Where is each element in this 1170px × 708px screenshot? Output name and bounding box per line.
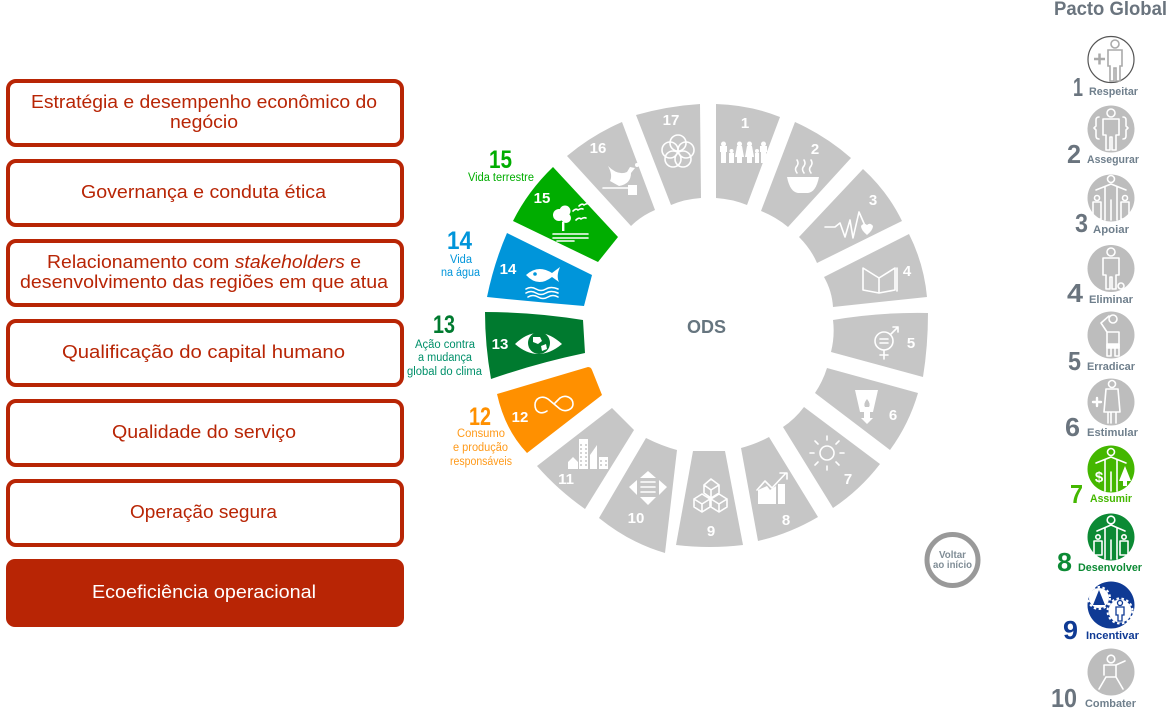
- label: ODS 12 Consumo e produção responsáveis: [450, 403, 512, 468]
- label: ODS 15 Vida terrestre: Vida terrestre: [468, 172, 534, 184]
- segment 15: [513, 167, 618, 262]
- label: ODS 13 Ação contra a mudança global do clima: 13: [433, 311, 455, 339]
- segment 7: 7: [844, 471, 852, 488]
- principle 2 Assegurar: 2: [1067, 139, 1081, 169]
- topic: Qualidade do serviço: [8, 401, 402, 465]
- topic: Governança e conduta ética: [8, 161, 402, 225]
- topic: Operação segura: Operação segura: [130, 501, 278, 522]
- principle 6 Estimular: 6: [1065, 412, 1080, 442]
- label: ODS 13 Ação contra a mudança global do clima: Ação contra: [415, 339, 476, 351]
- segment 10: [599, 438, 677, 553]
- topic: Operação segura: [8, 481, 402, 545]
- principle 5 Erradicar: Erradicar: [1087, 361, 1136, 373]
- segment 16: 16: [590, 140, 606, 157]
- panel: Pacto Global principles: [1051, 0, 1167, 708]
- segment 1: 1: [741, 115, 749, 132]
- principle 3 Apoiar: Apoiar: [1093, 224, 1130, 236]
- panel: materiality topics list: [6, 81, 404, 627]
- segment 13: [485, 312, 585, 379]
- topic: Relacionamento com stakeholders: Relacionamento com stakeholders e: [47, 251, 361, 272]
- segment 15: 15: [534, 190, 550, 207]
- segment 8: 8: [782, 512, 790, 529]
- topic: Ecoeficiência operacional (selected): [6, 559, 404, 627]
- principle 9 Incentivar: [1063, 582, 1140, 645]
- topic: Estratégia e desempenho econômico do negócio: [8, 81, 402, 145]
- segment 14: [487, 233, 592, 306]
- label: ODS 14 Vida na água: [441, 227, 481, 279]
- principle 5 Erradicar: 5: [1068, 346, 1081, 376]
- label: ODS 15 Vida terrestre: [468, 146, 534, 184]
- label: ODS 14 Vida na água: Vida: [450, 254, 473, 266]
- principle 9 Incentivar: Incentivar: [1086, 630, 1140, 642]
- segment 16: [567, 122, 655, 226]
- segment 12: [497, 367, 602, 453]
- label: ODS 14 Vida na água: na água: [441, 267, 481, 279]
- principle 3 Apoiar: 3: [1075, 208, 1088, 238]
- principle 1 Respeitar: 1: [1073, 72, 1083, 102]
- topic: Relacionamento com stakeholders: [8, 241, 402, 305]
- segment 5: 5: [907, 335, 915, 352]
- button: Voltar ao início: [927, 534, 978, 586]
- principle 1 Respeitar: Respeitar: [1089, 86, 1139, 98]
- principle 1 Respeitar: [1073, 36, 1139, 102]
- segment 17: [636, 104, 701, 205]
- principle 9 Incentivar: 9: [1063, 615, 1078, 645]
- topic: Relacionamento com stakeholders: desenvolvimento das regiões em que atua: [20, 271, 389, 292]
- segment 17: 17: [663, 112, 679, 129]
- topic: Qualificação do capital humano: [8, 321, 402, 385]
- principle 5 Erradicar: [1068, 312, 1136, 376]
- segment 9: 9: [707, 523, 715, 540]
- segment 3: 3: [869, 192, 877, 209]
- wheel centre label: ODS: [687, 317, 726, 337]
- segment 10: 10: [628, 510, 644, 527]
- segment 4: 4: [903, 263, 912, 280]
- segment 6: 6: [889, 407, 897, 424]
- topic: Estratégia e desempenho econômico do negócio: negócio: [170, 111, 238, 132]
- topic: Governança e conduta ética: Governança e conduta ética: [81, 181, 327, 202]
- label: ODS 12 Consumo e produção responsáveis: responsáveis: [450, 456, 512, 468]
- principle 8 Desenvolver: Desenvolver: [1078, 562, 1143, 574]
- label: ODS 13 Ação contra a mudança global do clima: a mudança: [418, 352, 473, 364]
- principle 4 Eliminar: 4: [1067, 278, 1084, 308]
- label: ODS 13 Ação contra a mudança global do clima: [407, 311, 483, 378]
- segment 3: [799, 169, 902, 263]
- topic: Estratégia e desempenho econômico do negócio: Estratégia e desempenho econômico do: [31, 91, 377, 112]
- principle 4 Eliminar: Eliminar: [1089, 294, 1134, 306]
- topic: Qualidade do serviço: Qualidade do serviço: [112, 421, 296, 442]
- principle 10 Combater: [1051, 648, 1137, 708]
- segment 5: [831, 313, 928, 377]
- label: ODS 12 Consumo e produção responsáveis: 12: [469, 403, 491, 431]
- label: ODS 15 Vida terrestre: 15: [489, 146, 512, 174]
- segment 9: [676, 451, 743, 547]
- button: Voltar ao início: Voltar: [939, 550, 966, 561]
- segment 6: [815, 368, 918, 450]
- segment 7: [783, 407, 880, 508]
- principle 6 Estimular: Estimular: [1087, 427, 1139, 439]
- button: Voltar ao início: ao início: [933, 560, 972, 571]
- principle 8 Desenvolver: [1057, 514, 1143, 577]
- segment 11: [537, 408, 634, 509]
- segment 14: 14: [500, 261, 517, 278]
- label: ODS 12 Consumo e produção responsáveis: Consumo: [457, 428, 505, 440]
- topic: Ecoeficiência operacional (selected): Ecoeficiência operacional: [92, 581, 316, 602]
- segment 11: 11: [558, 471, 574, 488]
- topic: Qualificação do capital humano: Qualificação do capital humano: [62, 341, 345, 362]
- segment 2: 2: [811, 141, 819, 158]
- segment 12: 12: [512, 409, 528, 426]
- label: ODS 13 Ação contra a mudança global do clima: global do clima: [407, 366, 483, 378]
- segment 2: [761, 122, 851, 227]
- label: ODS 12 Consumo e produção responsáveis: e produção: [453, 442, 508, 454]
- principle 7 Assumir: 7: [1070, 479, 1083, 509]
- segment 1: [716, 104, 780, 205]
- principle 4 Eliminar: [1067, 245, 1134, 308]
- principle 2 Assegurar: [1067, 106, 1140, 169]
- segment 13: 13: [492, 336, 508, 353]
- principle 7 Assumir: [1070, 446, 1134, 509]
- principle 7 Assumir: Assumir: [1090, 493, 1133, 505]
- principle 2 Assegurar: Assegurar: [1087, 154, 1140, 166]
- principle 8 Desenvolver: 8: [1057, 547, 1072, 577]
- principle 7 Assumir: $: [1095, 469, 1104, 486]
- chart: ODS wheel: [485, 104, 928, 553]
- principle 6 Estimular: [1065, 378, 1139, 442]
- principle 3 Apoiar: [1075, 174, 1134, 238]
- segment 8: [741, 437, 818, 541]
- label: ODS 14 Vida na água: 14: [447, 227, 472, 255]
- segment 4: [824, 234, 927, 307]
